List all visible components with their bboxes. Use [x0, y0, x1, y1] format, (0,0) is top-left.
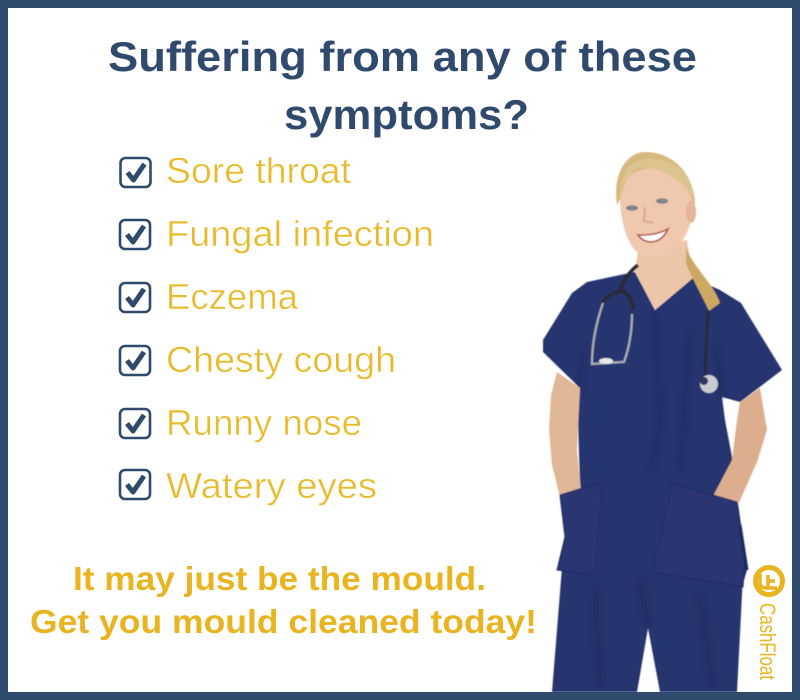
left arm: [549, 372, 581, 497]
side tie: [740, 525, 747, 570]
centre panel: [595, 482, 672, 575]
right arm: [712, 388, 767, 505]
smile: [638, 229, 668, 242]
scrub top: [543, 272, 782, 587]
item: fungal infection: Fungal infection: [166, 213, 434, 254]
logo mark: [756, 568, 782, 594]
item: watery eyes: Watery eyes: [166, 465, 377, 506]
pants shading: [595, 587, 712, 681]
hair highlight: [621, 159, 695, 200]
hair back: [616, 152, 695, 205]
nose shadow: [644, 207, 653, 223]
item: runny nose: Runny nose: [166, 402, 362, 443]
ear: [686, 201, 696, 223]
neck: [635, 240, 693, 310]
pants: [551, 570, 744, 692]
eyes: [626, 205, 638, 211]
stethoscope: [601, 265, 638, 310]
brand logo: [755, 568, 782, 680]
item: eczema: Eczema: [166, 276, 299, 317]
call to action: It may just be the mould.: [73, 560, 486, 597]
symptom checklist: [120, 150, 434, 506]
ponytail: [686, 247, 720, 311]
item: chesty cough: Chesty cough: [166, 339, 396, 380]
call to action: Get you mould cleaned today!: [30, 603, 537, 640]
face: [620, 168, 693, 257]
left pocket: [557, 482, 602, 575]
nurse figure: [543, 152, 782, 692]
item: sore throat: Sore throat: [166, 150, 351, 191]
right pocket: [652, 483, 745, 587]
title: [108, 33, 697, 138]
title: symptoms?: [284, 91, 529, 138]
scrub folds: [580, 312, 722, 470]
title: Suffering from any of these: [108, 33, 697, 80]
call to action: [30, 560, 537, 640]
